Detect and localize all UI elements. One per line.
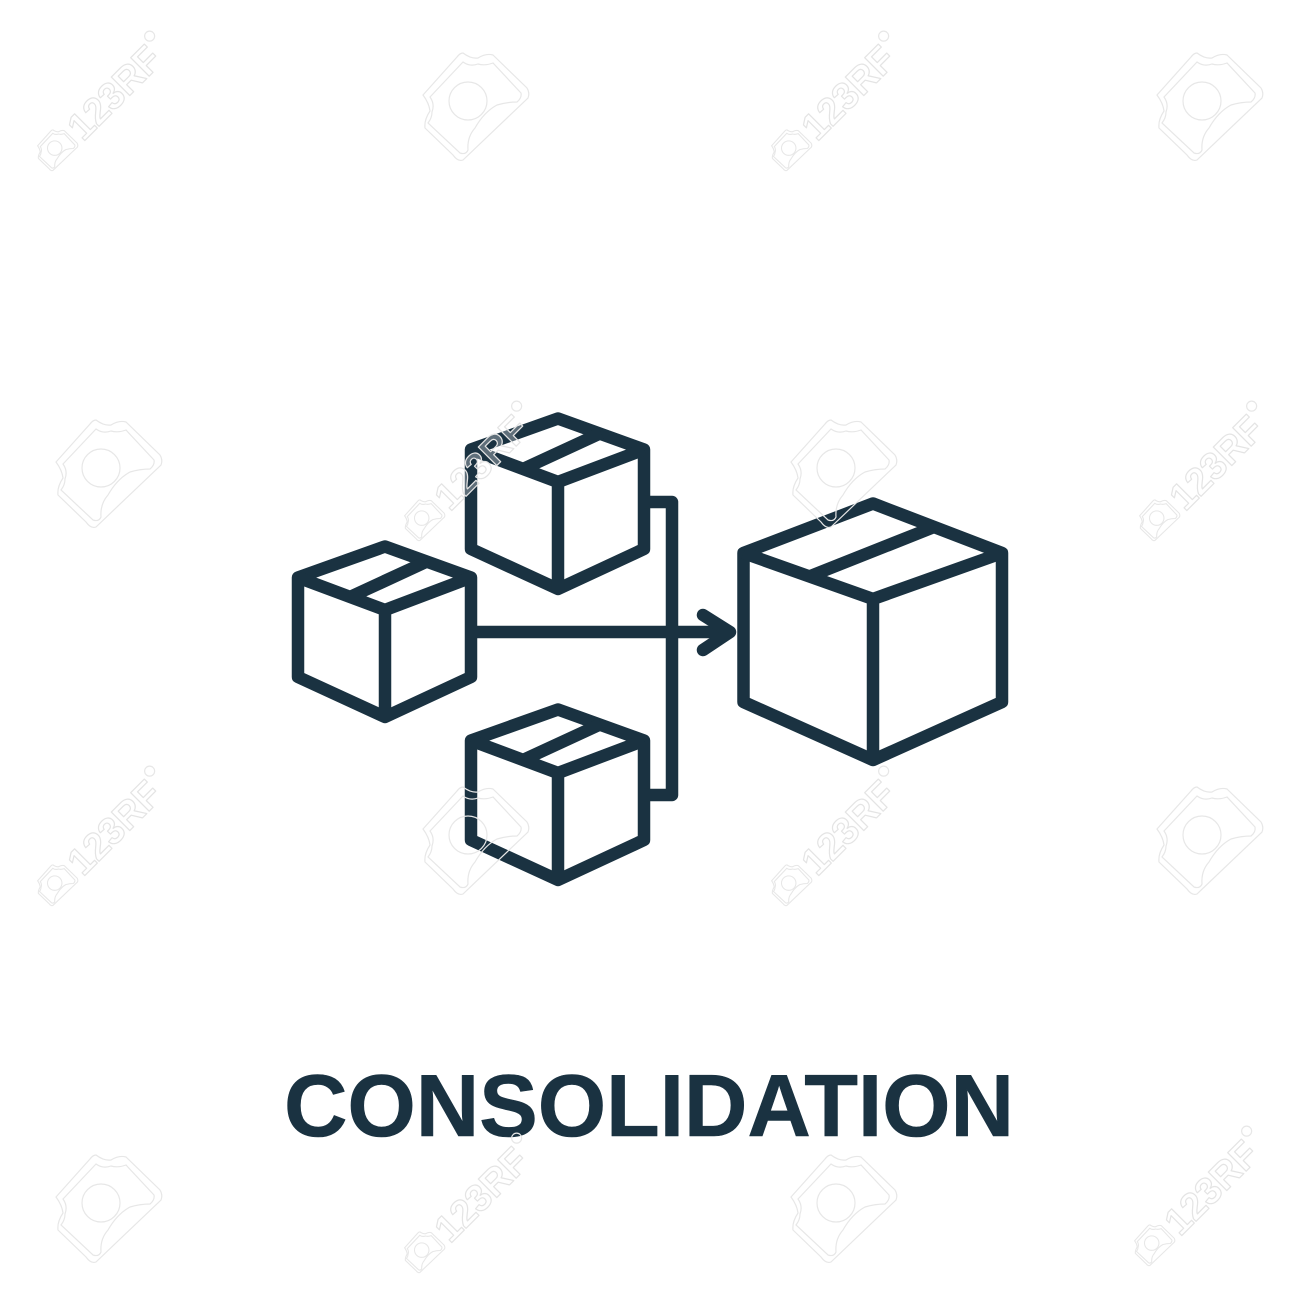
watermark: egg row 3 centre: [423, 787, 529, 894]
watermark: logo row 4 centre: 123RF: [427, 1140, 537, 1251]
watermark: egg top centre: [423, 53, 529, 160]
watermark: logo top middle: 123RF: [794, 38, 904, 149]
bracket connector: [644, 502, 672, 795]
watermark: egg row 4 centre: [791, 1155, 897, 1262]
watermark: logo row 2 centre: 123RF: [427, 408, 537, 519]
arrow: [471, 615, 730, 650]
watermark: logo row 2 centre: [405, 399, 546, 541]
watermark: logo row 2 right: [1140, 399, 1281, 541]
watermark: egg row 2 centre: [791, 420, 897, 527]
watermark: logo row 3 left: [38, 764, 179, 906]
watermark: egg top right: [1157, 53, 1263, 160]
icon: consolidation diagram: [298, 418, 1002, 880]
watermark: egg row 4 left: [56, 1155, 162, 1262]
icon: left small box: [298, 546, 471, 717]
title: CONSOLIDATION: [284, 1056, 1014, 1155]
watermark: logo top left: 123RF: [60, 38, 170, 149]
icon: bottom small box: [471, 710, 644, 880]
watermark: logo row 3 middle: [772, 764, 913, 906]
watermark: egg row 3 right: [1157, 787, 1263, 894]
watermark: logo row 3 left: 123RF: [60, 773, 170, 884]
watermark: logo row 4 centre: [405, 1131, 546, 1273]
watermark: logo row 3 middle: 123RF: [794, 773, 904, 884]
icon: large consolidated box: [744, 504, 1002, 760]
watermark: logo row 2 right: 123RF: [1162, 408, 1272, 519]
watermark: logo top middle: [772, 29, 913, 171]
watermark: logo top left: [38, 29, 179, 171]
icon: top small box: [471, 418, 644, 589]
watermark: logo row 4 right: 123RF: [1157, 1133, 1267, 1244]
watermark: logo row 4 right: [1135, 1124, 1276, 1266]
watermark: egg row 2 left: [56, 420, 162, 527]
